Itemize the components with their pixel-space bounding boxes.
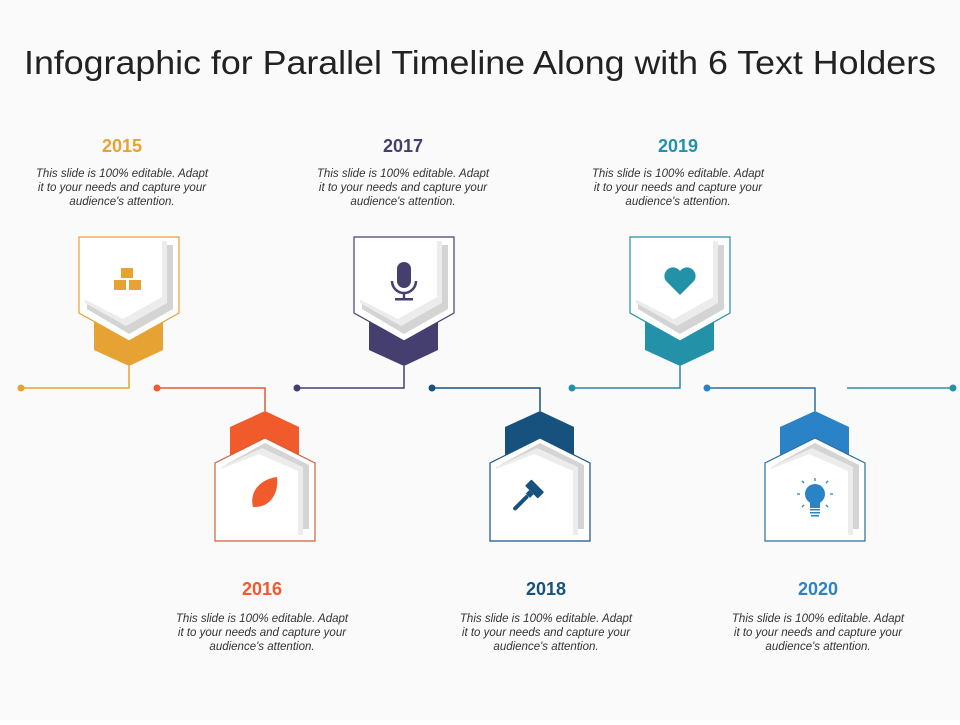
text block 2015: audience's attention. [69,196,175,208]
text block 2015: This slide is 100% editable. Adapt [36,168,209,180]
text block 2017 [317,136,490,208]
card 2016 [215,411,315,541]
card 2020 [765,411,865,541]
text block 2016: audience's attention. [209,641,315,653]
card 2019 [630,237,730,366]
text block 2018 [460,579,633,653]
text block 2019: it to your needs and capture your [594,182,763,194]
text block 2016: This slide is 100% editable. Adapt [176,613,349,625]
text block 2020: audience's attention. [765,641,871,653]
text block 2017: This slide is 100% editable. Adapt [317,168,490,180]
text block 2016 [176,579,349,653]
text block 2017: 2017 [383,136,423,156]
text block 2019 [592,136,765,208]
text block 2020: This slide is 100% editable. Adapt [732,613,905,625]
text block 2016: 2016 [242,579,282,599]
title: Infographic for Parallel Timeline Along with 6 Text Holders [24,44,936,81]
text block 2020: 2020 [798,579,838,599]
text block 2018: audience's attention. [493,641,599,653]
card 2017 [354,237,454,366]
text block 2018: This slide is 100% editable. Adapt [460,613,633,625]
icon: heart [664,267,696,295]
icon: leaf [252,477,277,507]
text block 2019: This slide is 100% editable. Adapt [592,168,765,180]
text block 2020 [732,579,905,653]
text block 2019: 2019 [658,136,698,156]
text block 2015 [36,136,209,208]
icon: boxes [114,268,141,290]
icon: microphone [392,262,416,300]
text block 2015: 2015 [102,136,142,156]
card 2015 [79,237,179,366]
text block 2020: it to your needs and capture your [734,627,903,639]
card 2018 [490,411,590,541]
text block 2017: it to your needs and capture your [319,182,488,194]
text block 2015: it to your needs and capture your [38,182,207,194]
text block 2019: audience's attention. [625,196,731,208]
text block 2018: 2018 [526,579,566,599]
icon: light bulb [797,478,833,516]
timeline dots [18,384,956,392]
icon: gavel [507,479,544,516]
text block 2018: it to your needs and capture your [462,627,631,639]
text block 2017: audience's attention. [350,196,456,208]
text block 2016: it to your needs and capture your [178,627,347,639]
timeline connectors [21,366,953,411]
